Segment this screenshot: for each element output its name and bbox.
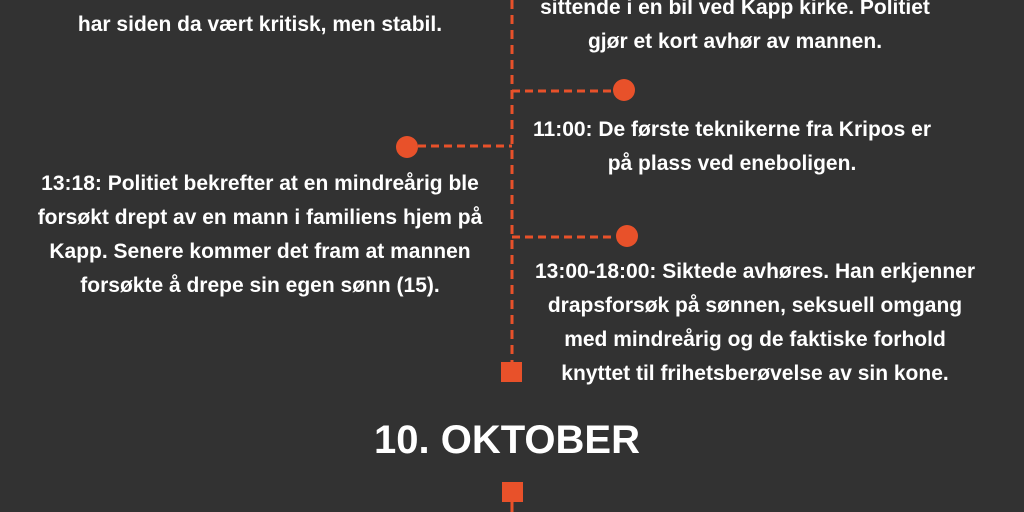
text: 13:18: forsøkt drept av en mann i familiens hjem på (38, 206, 482, 229)
connector and dot: 11:00 (512, 79, 635, 101)
text: 11:00: på plass ved eneboligen. (608, 152, 856, 175)
next section start square (502, 482, 523, 512)
text: left top: har siden da vært kritisk, men stabil. (78, 13, 442, 36)
text: 13:00-18:00 (535, 260, 975, 385)
text: 13:18 (38, 172, 482, 297)
connector and dot: 13:18 (396, 136, 512, 158)
text: right top: gjør et kort avhør av mannen. (588, 30, 882, 53)
text: 13:18: 13:18: Politiet bekrefter at en mindreårig ble (41, 172, 479, 195)
text: right top (540, 0, 930, 53)
text: 11:00 (533, 118, 931, 175)
text: 13:00-18:00: 13:00-18:00: Siktede avhøres. Han erkjenner (535, 260, 975, 283)
timeline vertical line (510, 0, 514, 362)
text: 13:18: Kapp. Senere kommer det fram at mannen (49, 240, 471, 263)
timeline end square (501, 362, 522, 382)
text: 13:18: forsøkte å drepe sin egen sønn (15). (80, 274, 440, 297)
text: 11:00: 11:00: De første teknikerne fra Kripos er (533, 118, 931, 141)
text: 13:00-18:00: knyttet til frihetsberøvelse av sin kone. (561, 362, 949, 385)
heading: 10. OKTOBER: 10. OKTOBER (374, 418, 640, 462)
text: 13:00-18:00: drapsforsøk på sønnen, seksuell omgang (548, 294, 962, 317)
text: 13:00-18:00: med mindreårig og de faktiske forhold (564, 328, 946, 351)
connector and dot: 13:00-18:00 (512, 225, 638, 247)
